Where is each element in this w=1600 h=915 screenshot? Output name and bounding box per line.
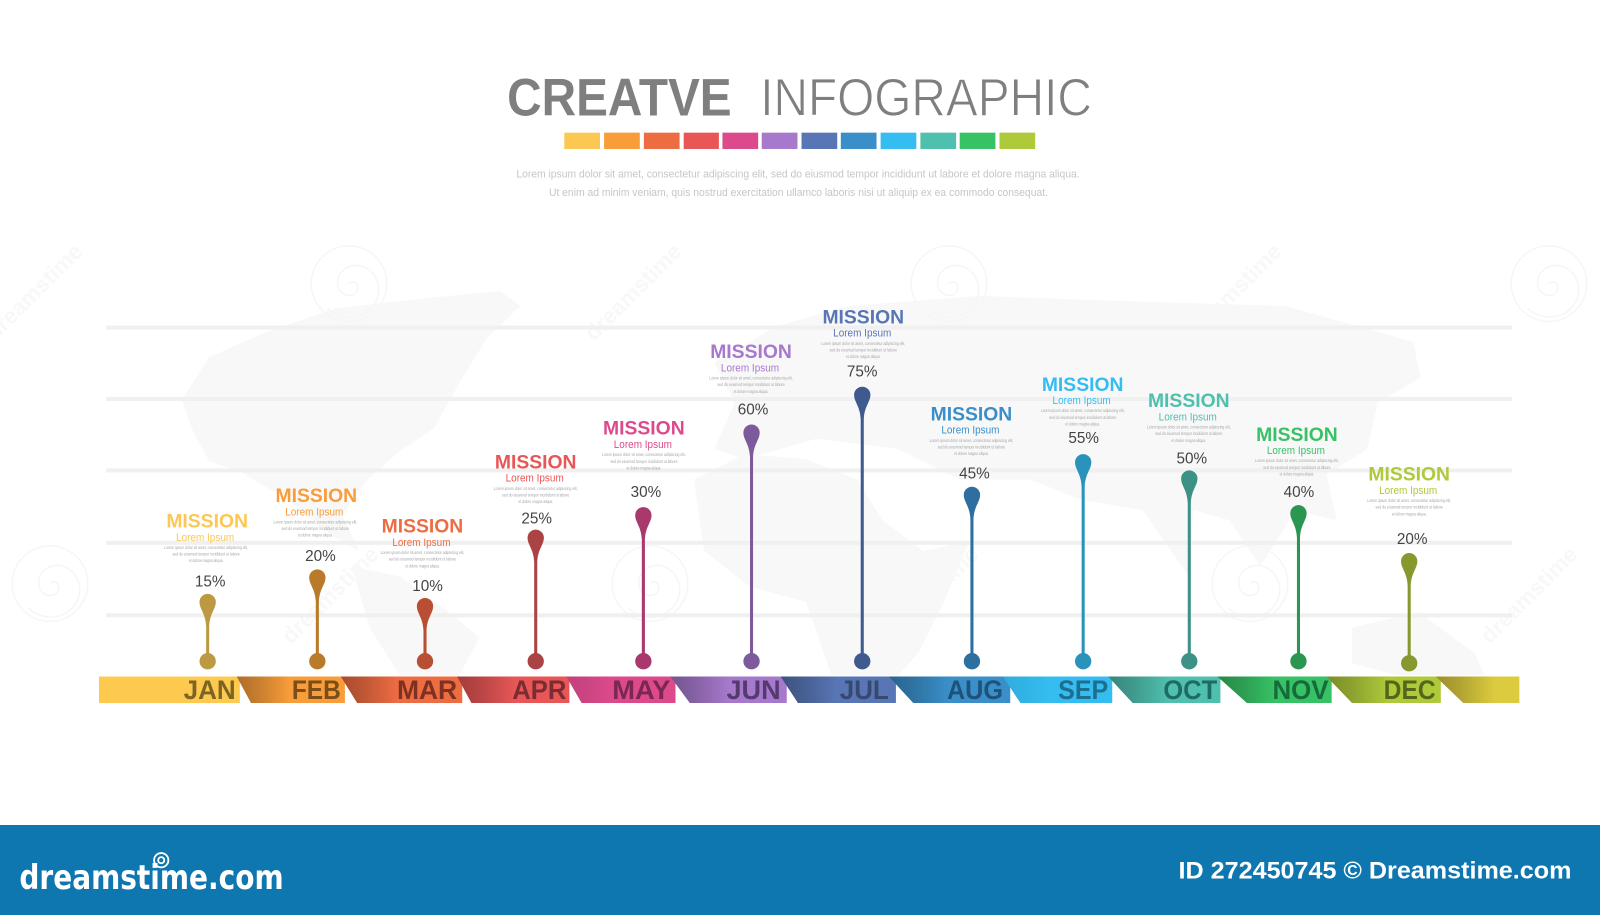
- month column: JAN: Lorem Ipsum: [176, 532, 234, 544]
- month column: OCT: Lorem ipsum dolor sit amet, consectetur adipiscing elit,: [1147, 425, 1231, 430]
- month column: MAR: et dolore magna aliqua.: [405, 563, 440, 568]
- month column: JUL: Lorem ipsum dolor sit amet, consectetur adipiscing elit,: [821, 341, 905, 346]
- watermark: spirals and diagonal text: dreamstime: [877, 542, 983, 648]
- month column: MAY: Lorem ipsum dolor sit amet, consectetur adipiscing elit,: [602, 452, 686, 457]
- month column: FEB: MISSION: [276, 485, 357, 507]
- watermark: spirals and diagonal text: [0, 239, 1587, 648]
- month column: FEB: 20%: [305, 548, 336, 565]
- month column: MAY: Lorem Ipsum: [614, 439, 672, 451]
- month column: DEC: et dolore magna aliqua.: [1392, 511, 1427, 516]
- month column: JUL: MISSION: [822, 306, 904, 328]
- month column: AUG: 45%: [959, 466, 990, 483]
- month column: NOV: 40%: [1284, 484, 1315, 501]
- month column: APR: 25%: [521, 510, 552, 527]
- month column: MAR: MAR: [397, 675, 457, 705]
- month column: FEB: Lorem ipsum dolor sit amet, consectetur adipiscing elit,: [273, 519, 357, 524]
- month column: DEC: Lorem Ipsum: [1379, 485, 1437, 497]
- footer bar: ID 272450745 © Dreamstime.com: [1179, 858, 1571, 885]
- month column: JUN: JUN: [727, 675, 781, 705]
- month column: JAN: sed do eiusmod tempor incididunt ut labore: [172, 552, 240, 557]
- month column: MAR: [381, 516, 464, 705]
- month column: DEC: Lorem ipsum dolor sit amet, consectetur adipiscing elit,: [1367, 498, 1451, 503]
- month column: JUL: et dolore magna aliqua.: [846, 354, 881, 359]
- month column: APR: MISSION: [495, 451, 577, 473]
- title: [507, 68, 1092, 127]
- month column: FEB: FEB: [292, 675, 341, 705]
- month column: OCT: [1147, 390, 1231, 705]
- month column: APR: Lorem Ipsum: [506, 473, 564, 485]
- month column: JUL: sed do eiusmod tempor incididunt ut labore: [830, 348, 898, 353]
- watermark: spirals and diagonal text: dreamstime: [1180, 239, 1286, 345]
- month column: JUN: sed do eiusmod tempor incididunt ut labore: [717, 382, 785, 387]
- month column: APR: et dolore magna aliqua.: [518, 499, 553, 504]
- month column: NOV: sed do eiusmod tempor incididunt ut labore: [1263, 465, 1331, 470]
- subtitle text: Ut enim ad minim veniam, quis nostrud exercitation ullamco laboris nisi ut aliquip ex ea commodo consequat.: [549, 187, 1048, 199]
- subtitle text: [516, 169, 1080, 199]
- month column: AUG: Lorem ipsum dolor sit amet, consectetur adipiscing elit,: [930, 438, 1013, 443]
- month column: NOV: [1255, 424, 1339, 705]
- month column: OCT: MISSION: [1148, 390, 1230, 412]
- month column: APR: sed do eiusmod tempor incididunt ut labore: [502, 492, 570, 497]
- month column: FEB: sed do eiusmod tempor incididunt ut labore: [282, 526, 350, 531]
- month column: APR: [494, 451, 578, 705]
- month column: JAN: JAN: [184, 675, 236, 705]
- world map background: [182, 291, 1485, 676]
- month column: OCT: sed do eiusmod tempor incididunt ut labore: [1155, 431, 1223, 436]
- title: CREATVE: [507, 68, 732, 127]
- month column: SEP: sed do eiusmod tempor incididunt ut labore: [1049, 415, 1117, 420]
- month column: SEP: et dolore magna aliqua.: [1065, 422, 1100, 427]
- month column: NOV: et dolore magna aliqua.: [1280, 472, 1314, 477]
- month column: MAR: sed do eiusmod tempor incididunt ut labore: [389, 557, 457, 562]
- month column: MAR: Lorem Ipsum: [392, 537, 451, 549]
- month column: DEC: [1367, 464, 1451, 705]
- watermark: spirals and diagonal text: dreamstime: [580, 239, 686, 345]
- month column: MAY: [602, 418, 686, 705]
- month column: JUL: [821, 306, 905, 705]
- month column: JUN: MISSION: [710, 341, 792, 363]
- month column: OCT: 50%: [1177, 450, 1208, 467]
- month column: JUL: JUL: [840, 675, 889, 705]
- title: INFOGRAPHIC: [760, 68, 1092, 127]
- month column: JAN: Lorem ipsum dolor sit amet, consectetur adipiscing elit,: [164, 545, 248, 550]
- month column: JUN: et dolore magna aliqua.: [734, 389, 768, 394]
- month column: JAN: et dolore magna aliqua.: [189, 558, 223, 563]
- month column: NOV: MISSION: [1256, 424, 1338, 446]
- month column: JAN: 15%: [195, 574, 226, 591]
- footer bar: [0, 825, 1600, 915]
- month column: AUG: et dolore magna aliqua.: [954, 451, 989, 456]
- month column: SEP: 55%: [1068, 430, 1099, 447]
- month column: SEP: Lorem Ipsum: [1053, 395, 1111, 407]
- month column: AUG: Lorem Ipsum: [941, 425, 1000, 437]
- month column: JAN: [164, 511, 248, 705]
- month column: MAR: 10%: [412, 578, 443, 595]
- month column: AUG: AUG: [947, 675, 1003, 705]
- month column: NOV: Lorem Ipsum: [1267, 445, 1325, 457]
- month column: APR: APR: [512, 675, 566, 705]
- month column: OCT: Lorem Ipsum: [1159, 411, 1217, 423]
- grid lines: [106, 326, 1512, 617]
- month column: MAY: sed do eiusmod tempor incididunt ut labore: [610, 459, 678, 464]
- footer bar: dreamstime.com: [19, 858, 284, 897]
- month column: JUL: 75%: [847, 364, 878, 381]
- colour swatch row: [564, 133, 1035, 149]
- month column: DEC: MISSION: [1368, 464, 1450, 486]
- month column: SEP: Lorem ipsum dolor sit amet, consectetur adipiscing elit,: [1041, 408, 1124, 413]
- month column: JUN: Lorem Ipsum: [721, 362, 779, 374]
- month column: FEB: et dolore magna aliqua.: [298, 533, 333, 538]
- month column: AUG: [930, 403, 1013, 705]
- subtitle text: Lorem ipsum dolor sit amet, consectetur adipiscing elit, sed do eiusmod tempor incididunt ut labore et dolore magna aliqua.: [516, 169, 1080, 181]
- month column: MAR: Lorem ipsum dolor sit amet, consectetur adipiscing elit,: [381, 550, 464, 555]
- month column: SEP: MISSION: [1042, 374, 1123, 396]
- month column: MAY: MAY: [612, 675, 671, 705]
- month column: NOV: Lorem ipsum dolor sit amet, consectetur adipiscing elit,: [1255, 458, 1339, 463]
- month column: FEB: Lorem Ipsum: [285, 506, 343, 518]
- month column: JUL: Lorem Ipsum: [833, 328, 891, 340]
- month column: SEP: [1041, 374, 1124, 705]
- month column: MAY: et dolore magna aliqua.: [627, 465, 661, 470]
- month column: MAY: 30%: [631, 484, 662, 501]
- month column: OCT: OCT: [1163, 675, 1217, 705]
- month column: SEP: SEP: [1058, 675, 1108, 705]
- month column: JAN: MISSION: [166, 511, 248, 533]
- month column: DEC: DEC: [1384, 675, 1436, 705]
- month column: APR: Lorem ipsum dolor sit amet, consectetur adipiscing elit,: [494, 486, 578, 491]
- watermark: spirals and diagonal text: dreamstime: [1476, 542, 1582, 648]
- month column: MAR: MISSION: [382, 516, 463, 538]
- month column: DEC: 20%: [1397, 531, 1428, 548]
- month column: OCT: et dolore magna aliqua.: [1171, 438, 1206, 443]
- month column: NOV: NOV: [1272, 675, 1329, 705]
- month column: JUN: 60%: [738, 401, 769, 418]
- month column: AUG: sed do eiusmod tempor incididunt ut labore: [938, 444, 1006, 449]
- watermark: spirals and diagonal text: dreamstime: [277, 542, 383, 648]
- month column: JUN: [709, 341, 793, 705]
- month column: FEB: [273, 485, 357, 705]
- month column: JUN: Lorem ipsum dolor sit amet, consectetur adipiscing elit,: [709, 376, 793, 381]
- month column: MAY: MISSION: [603, 418, 685, 440]
- month column: AUG: MISSION: [931, 403, 1012, 425]
- month column: DEC: sed do eiusmod tempor incididunt ut labore: [1376, 505, 1443, 510]
- ribbon timeline band: [99, 677, 1519, 703]
